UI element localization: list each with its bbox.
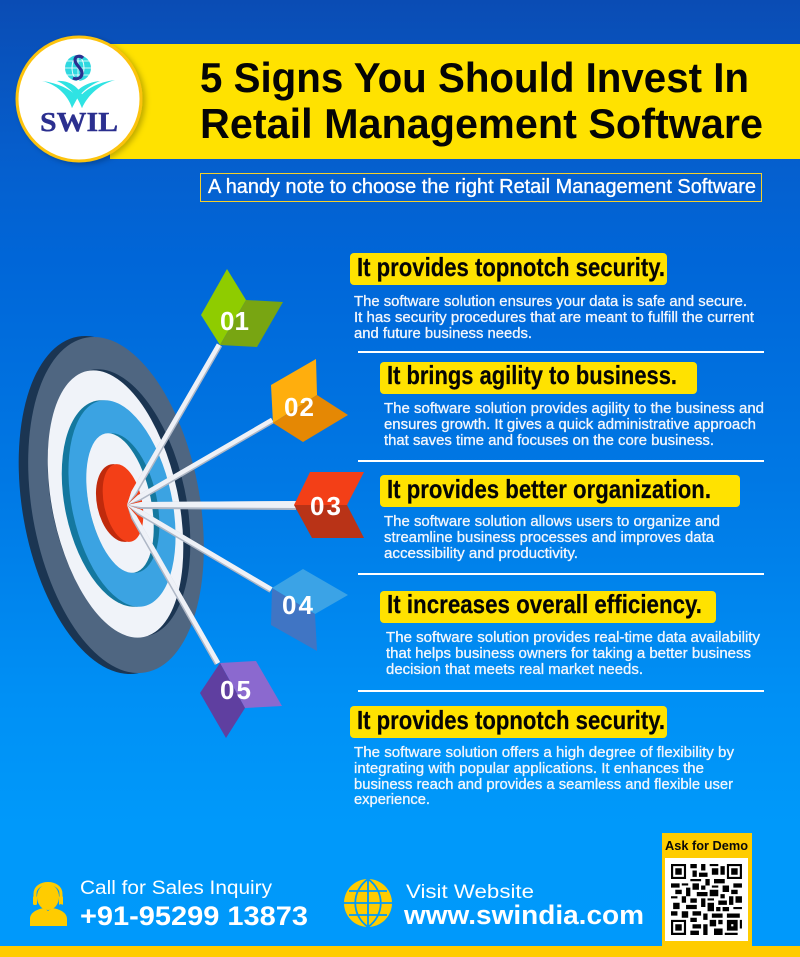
sign 3 body: accessibility and productivity.: [384, 545, 578, 562]
sign 1 body: [354, 293, 755, 342]
arrow 04: [127, 505, 348, 651]
website contact: Visit Website: [406, 882, 534, 903]
title: 5 Signs You Should Invest In: [200, 54, 749, 101]
sign 2 body: [384, 400, 764, 449]
subtitle: A handy note to choose the right Retail Management Software: [208, 176, 756, 198]
sign 1 body: and future business needs.: [354, 325, 532, 342]
panel: sign 3: It provides better organization.: [387, 474, 711, 504]
sign 4 body: [386, 629, 760, 678]
sign 5 body: [354, 744, 734, 808]
website contact: www.swindia.com: [403, 900, 644, 930]
arrow 01: 01: [220, 306, 249, 336]
sign 5 body: integrating with popular applications. It enhances the: [354, 760, 704, 777]
target board: [0, 322, 228, 688]
arrow 02: 02: [284, 392, 314, 422]
title: [200, 54, 763, 147]
arrow 05: [127, 505, 282, 738]
panel: sign 2: [380, 360, 764, 449]
sign 3 body: streamline business processes and improves data: [384, 529, 715, 546]
sign 1 body: It has security procedures that are meant to fulfill the current: [354, 309, 755, 326]
sign 3 body: [384, 513, 720, 562]
QR code: [671, 864, 742, 935]
icon: globe with S: [65, 55, 91, 81]
sign 1 body: The software solution ensures your data is safe and secure.: [354, 293, 747, 310]
sign 5 body: business reach and provides a seamless and flexible user: [354, 776, 733, 793]
sign 2 body: ensures growth. It gives a quick administrative approach: [384, 416, 756, 433]
sign 3 body: The software solution allows users to organize and: [384, 513, 720, 530]
header banner: [110, 44, 800, 159]
sign 4 body: decision that meets real market needs.: [386, 661, 643, 678]
sign 5 body: experience.: [354, 791, 430, 808]
panel: sign 4: [380, 589, 760, 678]
arrow 05: 05: [220, 675, 251, 705]
panel: sign 2: It brings agility to business.: [387, 360, 677, 390]
panel: sign 1: It provides topnotch security.: [357, 252, 665, 282]
website contact: [403, 882, 644, 930]
QR demo card: [662, 833, 752, 946]
bottom bar: [0, 946, 800, 957]
panel: sign 1: [350, 252, 755, 342]
icon: globe: [344, 879, 392, 927]
panel: sign 4: It increases overall efficiency.: [387, 589, 702, 619]
arrow 03: 03: [310, 491, 341, 521]
sales contact: Call for Sales Inquiry: [80, 878, 273, 899]
arrow 04: 04: [282, 590, 314, 620]
sales contact: +91-95299 13873: [80, 901, 308, 931]
title: Retail Management Software: [200, 100, 763, 147]
icon: swoosh: [42, 80, 115, 108]
panel: sign 5: [350, 705, 734, 808]
icon: sales agent: [30, 884, 67, 926]
logo badge: [17, 37, 141, 161]
arrow 01: [127, 269, 283, 505]
panel: sign 3: [380, 474, 740, 562]
panel: sign 5: It provides topnotch security.: [357, 705, 665, 735]
sign 4 body: that helps business owners for taking a better business: [386, 645, 751, 662]
logo wordmark: SWIL: [40, 107, 118, 137]
arrow 03: [127, 472, 364, 538]
QR demo card: Ask for Demo: [665, 839, 748, 853]
sign 5 body: The software solution offers a high degree of flexibility by: [354, 744, 734, 761]
sign 2 body: that saves time and focuses on the core business.: [384, 432, 714, 449]
sign 4 body: The software solution provides real-time data availability: [386, 629, 760, 646]
sales contact: [80, 878, 308, 931]
arrow 02: [127, 359, 348, 505]
sign 2 body: The software solution provides agility to the business and: [384, 400, 764, 417]
